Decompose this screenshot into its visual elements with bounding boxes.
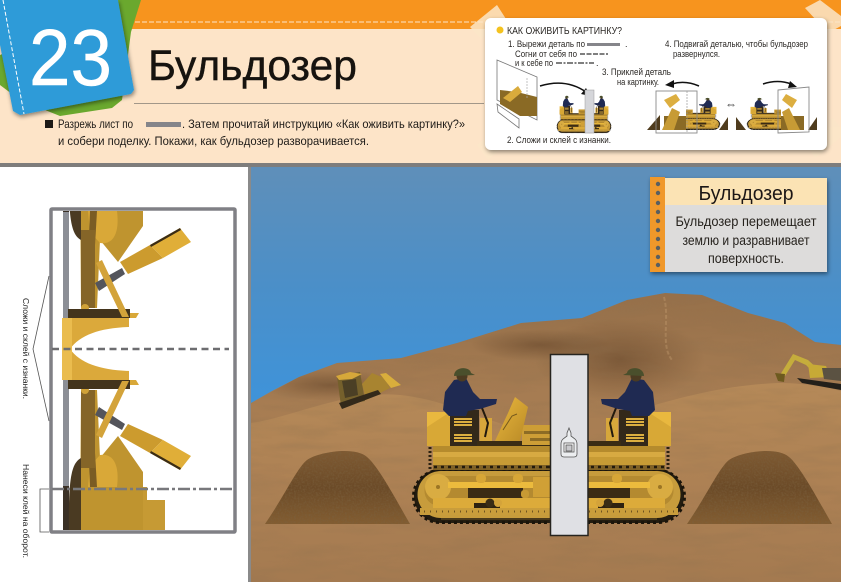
diagram: turned right <box>736 87 817 133</box>
instruction text: Разрежь лист по <box>58 117 133 131</box>
header cream panel <box>0 0 841 163</box>
instruction text: и собери поделку. Покажи, как бульдозер разворачивается. <box>58 134 369 148</box>
left soil mound <box>265 451 410 524</box>
note text: поверхность. <box>708 251 784 266</box>
icon: glue bottle <box>561 428 577 457</box>
note text <box>676 214 816 266</box>
note header <box>665 178 827 205</box>
steps text: . <box>625 39 628 49</box>
instruction text <box>45 117 465 148</box>
fold line, dash-dot <box>52 488 233 490</box>
arrow: fold to picture <box>540 83 590 96</box>
steps text <box>507 39 808 145</box>
diagram: folded part <box>497 60 537 128</box>
front sand dune, left <box>251 394 640 530</box>
orange top band <box>130 0 841 29</box>
label: glue area: Нанеси клей на оборот. <box>21 464 31 558</box>
cut-out bulldozer front, top half <box>62 211 191 530</box>
number tag: 23 <box>0 0 141 116</box>
pop-up strip <box>550 354 588 536</box>
bracket: glue area <box>40 489 49 532</box>
steps text: и к себе по <box>515 58 553 68</box>
fold line, dashed <box>52 348 229 350</box>
note text: землю и разравнивает <box>682 233 810 248</box>
note spine <box>650 177 665 272</box>
steps text: Согни от себя по <box>515 49 577 59</box>
steps text: . <box>596 58 599 68</box>
steps text: на картинку. <box>617 77 659 87</box>
foreground ground <box>251 470 841 582</box>
steps text: 3. Приклей деталь <box>602 67 671 77</box>
grey separator under header <box>0 163 841 167</box>
tape pieces <box>470 0 841 160</box>
panel: note card <box>650 177 827 272</box>
diagram: glued part <box>557 90 611 133</box>
distant bulldozer <box>336 372 401 409</box>
bracket: fold and glue <box>33 276 49 421</box>
double arrow: ⇔ <box>725 97 737 111</box>
back hill <box>251 293 841 582</box>
arrow: turn left <box>665 80 699 88</box>
note rings <box>656 182 660 267</box>
right soil mound <box>687 451 832 524</box>
note text: Бульдозер перемещает <box>676 214 816 229</box>
bulldozer, left half <box>414 368 549 523</box>
sky <box>251 167 841 427</box>
sand texture <box>288 404 729 460</box>
title: Бульдозер <box>148 42 357 90</box>
scene: construction site <box>251 167 841 582</box>
note body <box>665 205 827 272</box>
card heading: КАК ОЖИВИТЬ КАРТИНКУ? <box>507 26 622 37</box>
title rule <box>134 103 484 104</box>
bulldozer, right half <box>549 368 684 523</box>
steps text: 1. Вырежи деталь по <box>508 39 585 49</box>
steps text: 2. Сложи и склей с изнанки. <box>507 135 611 145</box>
arrow: turn right <box>763 81 797 88</box>
panel: how to animate the picture <box>470 0 841 160</box>
distant excavator <box>775 354 841 390</box>
panel: cut-out sheet <box>0 166 251 582</box>
hill shadows <box>278 297 686 398</box>
steps text: 4. Подвигай деталью, чтобы бульдозер <box>665 39 808 49</box>
steps text: развернулся. <box>673 49 720 59</box>
instruction text: . Затем прочитай инструкцию «Как оживить картинку?» <box>182 117 465 131</box>
number tag: 23: 23 <box>29 13 112 102</box>
cut frame <box>51 209 235 532</box>
front sand dune, right <box>640 383 841 530</box>
card <box>485 18 827 150</box>
label: fold and glue: Сложи и склей с изнанки. <box>21 298 31 399</box>
note title: Бульдозер <box>698 183 794 205</box>
diagram: turned left <box>647 91 728 133</box>
